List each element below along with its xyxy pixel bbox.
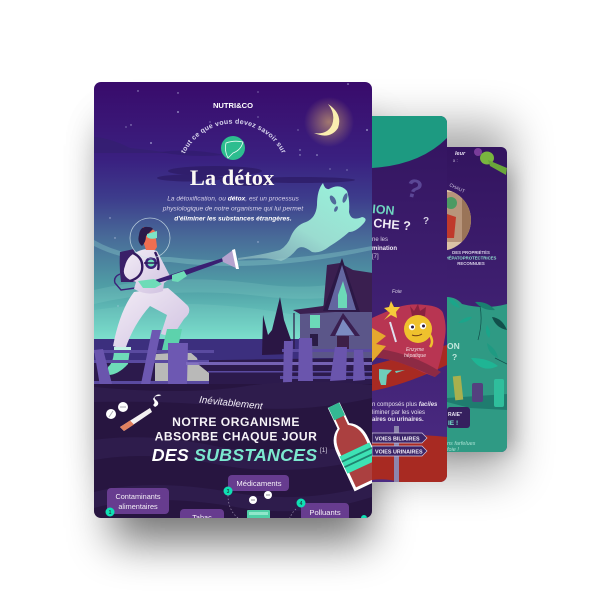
panel: middle card bbox=[372, 116, 447, 482]
sky background bbox=[94, 82, 372, 340]
label: tabac bbox=[180, 509, 224, 529]
illustration: ghost bbox=[238, 183, 366, 261]
illustration: astronaut bbox=[108, 218, 239, 375]
subheading: Inévitablement bbox=[199, 395, 264, 412]
middle heading: ION bbox=[372, 202, 395, 218]
gloves bbox=[138, 279, 162, 288]
stars bbox=[109, 83, 368, 307]
leaves bbox=[448, 297, 507, 369]
heading bbox=[152, 415, 317, 465]
teal top wave bbox=[372, 116, 447, 168]
liver bbox=[372, 304, 446, 377]
illustration: rock bbox=[155, 352, 209, 381]
footnote ref: [1] bbox=[320, 447, 327, 454]
icon: crescent moon bbox=[306, 99, 352, 145]
funnel icon bbox=[379, 369, 405, 385]
back card text: CHAUT bbox=[448, 182, 466, 195]
explanation text: n composés plus faciles bbox=[372, 402, 438, 408]
back card text: leur bbox=[455, 151, 466, 157]
explanation text: aires ou urinaires. bbox=[372, 417, 424, 423]
red lower band bbox=[372, 345, 447, 391]
badge 1: 1 bbox=[109, 510, 112, 516]
teal lower section bbox=[447, 297, 507, 452]
emblem bbox=[144, 257, 158, 269]
panel: back card: ? bbox=[452, 352, 457, 362]
purple cta box: RAIE" bbox=[448, 412, 463, 418]
badge 3: 3 bbox=[227, 489, 230, 495]
head bbox=[142, 227, 157, 250]
gun tube bbox=[152, 258, 224, 284]
illustration: fence left bbox=[94, 330, 214, 386]
panel: main card bbox=[94, 82, 372, 518]
signpost: VOIES URINAIRES bbox=[375, 450, 423, 456]
lightning bbox=[372, 328, 386, 362]
red bottom section bbox=[372, 435, 447, 482]
product shelf bbox=[447, 394, 507, 410]
intro text: physiologique de notre organisme qui lui permet bbox=[162, 206, 304, 212]
middle text: Foie bbox=[392, 289, 402, 295]
illustration: fence right bbox=[186, 338, 372, 383]
lower waves bbox=[94, 381, 372, 511]
badge 4 bbox=[296, 498, 306, 508]
explanation text: liminer par les voies bbox=[372, 410, 425, 416]
partial heading: ON bbox=[447, 341, 460, 351]
enzyme label: Enzyme bbox=[406, 347, 424, 353]
heading: DES SUBSTANCES bbox=[152, 445, 317, 465]
boots bbox=[108, 349, 130, 375]
badge 4: 4 bbox=[300, 501, 303, 507]
label: polluants: Polluants bbox=[309, 508, 341, 517]
back card text: x : bbox=[453, 158, 458, 163]
signpost: VOIES BILIAIRES bbox=[375, 436, 420, 442]
icon: liver badge bbox=[221, 136, 245, 160]
intro text: La détoxification, ou détox, est un processus bbox=[167, 196, 299, 202]
illustration: dead tree silhouette bbox=[262, 297, 291, 355]
enzyme label: hépatique bbox=[404, 353, 426, 359]
question marks: ? bbox=[403, 172, 426, 205]
sky light bands bbox=[94, 240, 372, 308]
product bottles bbox=[453, 376, 504, 407]
signpost bbox=[372, 426, 427, 482]
torso bbox=[124, 249, 171, 294]
enzyme character bbox=[384, 301, 432, 347]
middle heading bbox=[372, 204, 410, 230]
label: contaminants bbox=[107, 488, 169, 514]
label: tabac: Tabac bbox=[192, 513, 212, 522]
illustration circle bbox=[447, 190, 471, 250]
middle text: mination bbox=[372, 246, 397, 252]
badge 5 bbox=[361, 515, 367, 521]
drop shadows bbox=[110, 125, 512, 542]
middle heading: CHE ? bbox=[373, 216, 411, 233]
ground: dark soil bbox=[94, 358, 372, 400]
badge 1 bbox=[106, 508, 114, 516]
backpack bbox=[120, 249, 136, 282]
properties text: DES PROPRIÉTÉS bbox=[452, 250, 490, 255]
closing text bbox=[447, 441, 476, 451]
purple cta box: IE ! bbox=[448, 420, 458, 427]
middle text: ne les bbox=[372, 237, 388, 243]
title: La détox bbox=[190, 165, 275, 190]
middle text: [7] bbox=[372, 254, 379, 260]
intro text: d'éliminer les substances étrangères. bbox=[174, 216, 292, 222]
panel: back card bbox=[447, 147, 507, 452]
icon: wine bottle bbox=[318, 398, 386, 491]
badge 3 bbox=[224, 486, 232, 496]
properties text bbox=[446, 250, 497, 266]
properties text: RECONNUES bbox=[457, 261, 485, 266]
icon: thistle bbox=[474, 148, 507, 175]
icon: medicine jar bbox=[247, 510, 270, 522]
ghost face bbox=[330, 193, 348, 212]
question marks: ? bbox=[423, 216, 429, 227]
ground: sea band bbox=[94, 339, 333, 360]
icon: cigarette bbox=[120, 394, 161, 431]
heading: NOTRE ORGANISME bbox=[172, 415, 300, 429]
label: contaminants: alimentaires bbox=[118, 502, 158, 511]
explanation text bbox=[372, 402, 438, 423]
nozzle bbox=[222, 250, 238, 269]
middle text bbox=[372, 237, 402, 295]
lower section background bbox=[94, 384, 372, 518]
helmet ring bbox=[130, 218, 170, 258]
illustration: haunted house bbox=[293, 258, 375, 358]
clouds bbox=[94, 137, 355, 186]
pills and connector bbox=[228, 491, 296, 520]
label: medicaments bbox=[228, 475, 289, 491]
back card text bbox=[450, 151, 466, 192]
closing text: ns farfelues bbox=[447, 441, 476, 447]
harness bbox=[130, 253, 142, 281]
logo: NUTRI&CO: NUTRI&CO bbox=[213, 101, 253, 110]
label: medicaments: Médicaments bbox=[236, 479, 282, 488]
label: polluants bbox=[301, 503, 349, 521]
legs bbox=[113, 288, 189, 350]
closing text: foie ! bbox=[447, 447, 459, 453]
hose bbox=[115, 274, 142, 290]
properties text: HÉPATOPROTECTRICES bbox=[446, 256, 497, 260]
curved subtitle: tout ce que vous devez savoir sur bbox=[181, 118, 286, 154]
purple cta box bbox=[447, 407, 470, 428]
label: contaminants: Contaminants bbox=[115, 492, 161, 501]
enzyme label bbox=[404, 347, 426, 359]
intro text bbox=[162, 196, 304, 222]
icon: pills bbox=[106, 402, 128, 419]
question marks bbox=[408, 179, 428, 224]
heading: ABSORBE CHAQUE JOUR bbox=[155, 430, 317, 444]
